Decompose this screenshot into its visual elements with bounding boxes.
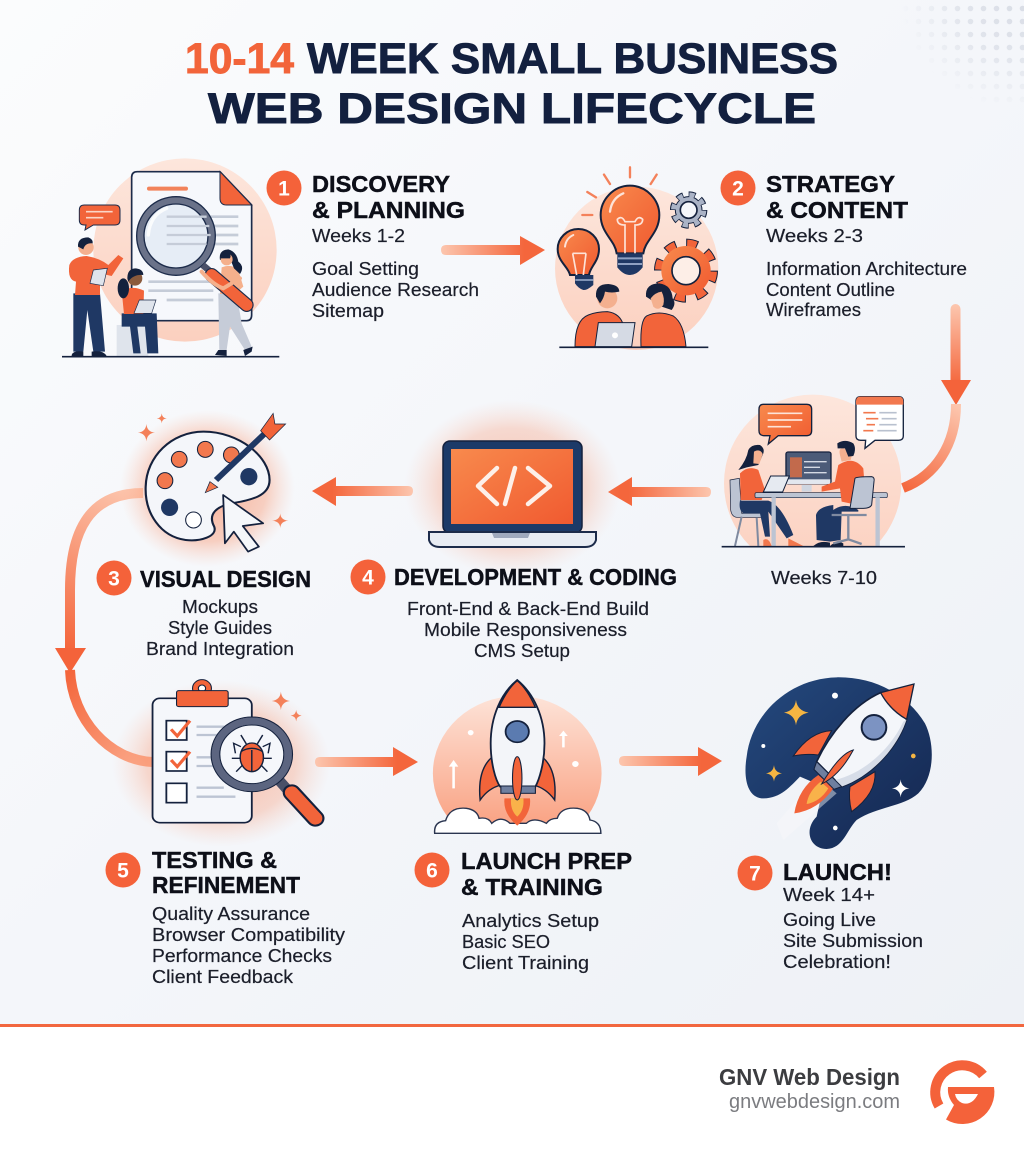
step 3 tasks [146, 596, 294, 659]
step 1 heading: & PLANNING [312, 197, 465, 223]
step 2 tasks: Information Architecture [766, 258, 967, 279]
arrow: palette down to testing [55, 493, 152, 762]
step 4 tasks [407, 598, 649, 661]
arrow: step 2 to development scene [903, 309, 971, 488]
step 6 heading: LAUNCH PREP [461, 848, 632, 874]
step 3 heading: VISUAL DESIGN [140, 566, 311, 592]
step 6 heading [461, 848, 632, 900]
panel: step 6 launch prep and training [414, 680, 632, 973]
step 4 tasks: Front-End & Back-End Build [407, 598, 649, 619]
step 4 heading: DEVELOPMENT & CODING [394, 564, 677, 590]
step 1 heading [312, 171, 465, 223]
step 7 tasks [783, 909, 923, 972]
brand url: gnvwebdesign.com [729, 1091, 900, 1113]
step 1 tasks: Audience Research [312, 279, 479, 300]
step number 4: 4 [362, 566, 374, 590]
step 5 tasks: Quality Assurance [152, 903, 310, 924]
step number 7: 7 [749, 862, 761, 886]
panel: step 3 visual design [96, 410, 311, 659]
step number 5: 5 [117, 860, 129, 882]
title: 10-14 [185, 35, 294, 83]
decorative dot grid [929, 6, 1024, 86]
step 6 heading: & TRAINING [461, 874, 603, 900]
step 7 timing: Week 14+ [783, 884, 875, 905]
brand name: GNV Web Design [719, 1064, 900, 1090]
title: WEEK SMALL BUSINESS [307, 35, 838, 83]
step number 7 [738, 856, 772, 890]
step number 5 [106, 852, 140, 888]
step 2 tasks [766, 258, 967, 320]
icon: paint palette with brush and cursor [120, 410, 295, 567]
panel: step 1 discovery and planning [62, 158, 479, 357]
step 1 tasks: Goal Setting [312, 258, 419, 279]
illustration: team reviewing document with magnifier [62, 158, 279, 357]
title [185, 35, 838, 133]
step 1 tasks [312, 258, 479, 321]
step number 1: 1 [278, 178, 290, 200]
step number 2 [720, 170, 756, 206]
title: WEB DESIGN LIFECYCLE [208, 85, 816, 133]
logo: G mark [935, 1065, 994, 1124]
step 6 tasks: Analytics Setup [462, 910, 599, 931]
step 1 heading: DISCOVERY [312, 171, 450, 197]
step 3 tasks: Brand Integration [146, 638, 294, 659]
step 2 heading: & CONTENT [766, 197, 908, 223]
step 2 tasks: Content Outline [766, 279, 895, 300]
step number 3 [96, 560, 132, 596]
footer band [0, 1024, 1024, 1154]
icon: rocket flying through space blob [745, 677, 932, 849]
step 7 heading: LAUNCH! [783, 859, 892, 885]
step 5 tasks [152, 903, 346, 987]
step 6 tasks: Client Training [462, 952, 589, 973]
arrow: laptop to palette [312, 477, 413, 506]
step 5 tasks: Browser Compatibility [152, 924, 346, 945]
step 5 heading [152, 847, 300, 898]
panel: step 7 launch [738, 677, 932, 972]
step 4 tasks: Mobile Responsiveness [424, 619, 627, 640]
arrow: testing to launch prep [315, 747, 418, 776]
panel: step 4 development and coding [350, 400, 677, 661]
step number 4 [350, 560, 386, 594]
step number 6: 6 [426, 860, 438, 882]
step 7 tasks: Going Live [783, 909, 876, 930]
step 7 tasks: Celebration! [783, 951, 891, 972]
step 5 heading: REFINEMENT [152, 872, 300, 898]
step number 3: 3 [108, 568, 120, 590]
step 1 timing: Weeks 1-2 [312, 225, 405, 246]
step 2 heading: STRATEGY [766, 171, 895, 197]
step 5 tasks: Client Feedback [152, 966, 294, 987]
step number 1 [266, 170, 302, 206]
arrow: step 1 to step 2 [441, 236, 545, 265]
icon: rocket lifting off from clouds [433, 680, 602, 851]
step 6 tasks: Basic SEO [462, 931, 550, 952]
step 5 tasks: Performance Checks [152, 945, 332, 966]
step 5 heading: TESTING & [152, 847, 277, 873]
panel: weeks 7-10 development scene [722, 395, 905, 588]
step 2 timing: Weeks 2-3 [766, 225, 863, 246]
step 2 heading [766, 171, 908, 223]
panel: step 5 testing and refinement [106, 680, 346, 987]
step 4 tasks: CMS Setup [474, 640, 570, 661]
panel: step 2 strategy and content [555, 167, 967, 350]
step 3 tasks: Style Guides [168, 617, 272, 638]
arrow: launch prep to launch [619, 747, 722, 776]
step 7 tasks: Site Submission [783, 930, 923, 951]
step 2 tasks: Wireframes [766, 299, 861, 320]
icon: laptop with code symbol [404, 400, 620, 576]
weeks 7-10 label: Weeks 7-10 [771, 567, 877, 588]
illustration: two people working at a desk [722, 394, 905, 548]
step 6 tasks [462, 910, 599, 973]
illustration: light bulbs, gears and two people [555, 167, 718, 350]
icon: checklist clipboard with bug under magnifier [112, 680, 330, 847]
step 3 tasks: Mockups [182, 596, 258, 617]
step 1 tasks: Sitemap [312, 300, 384, 321]
arrow: development scene to laptop [608, 477, 711, 506]
step number 6 [414, 852, 450, 888]
step number 2: 2 [732, 178, 744, 200]
